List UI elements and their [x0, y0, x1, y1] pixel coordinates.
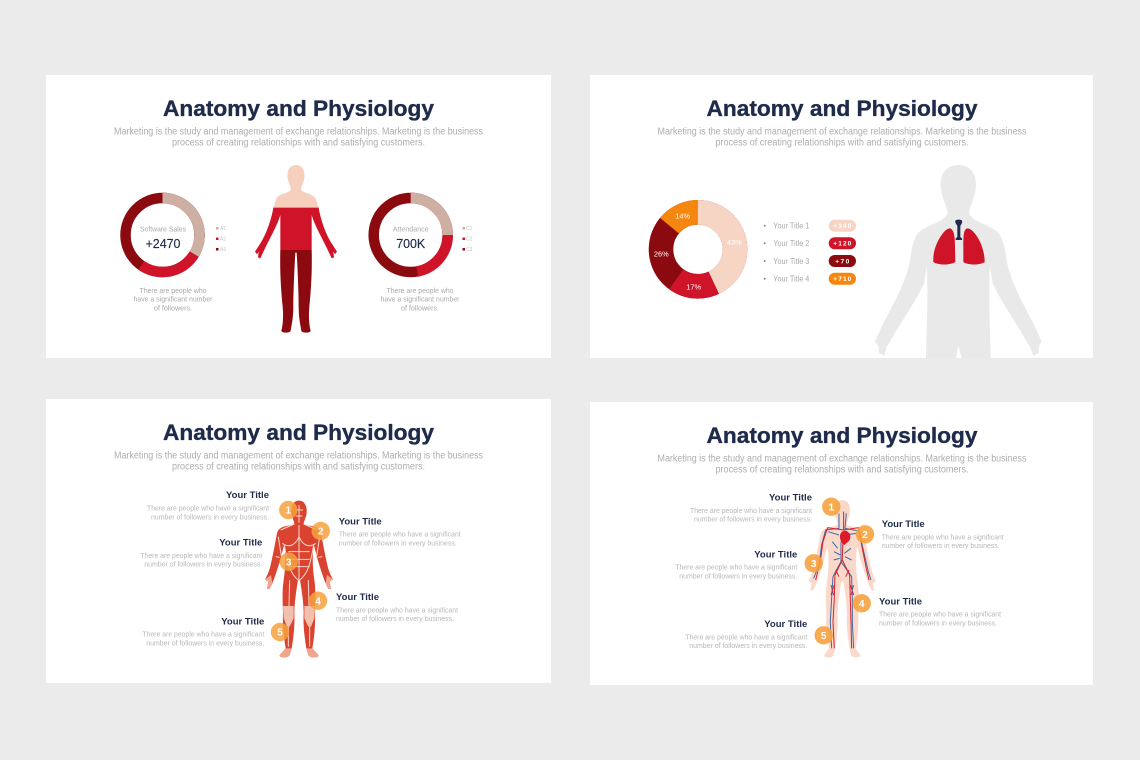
callout 3: There are people who have a significant: [675, 563, 798, 572]
intro text: process of creating relationships with and satisfying customers.: [716, 464, 968, 476]
numbered marker 4: 4: [315, 596, 321, 607]
caption: right donut: of followers.: [401, 303, 439, 312]
callout 5: number of followers in every business.: [146, 638, 264, 647]
callout 5: [685, 619, 808, 650]
human silhouette with lungs: [875, 165, 1042, 358]
donut label: software sales: [140, 224, 186, 251]
red arteries: [816, 512, 869, 648]
numbered marker 1: 1: [829, 502, 835, 513]
callout 2: number of followers in every business.: [882, 541, 1000, 550]
numbered marker 5: 5: [821, 631, 827, 642]
numbered marker 5: [271, 623, 289, 641]
callout 3: Your Title: [219, 538, 262, 549]
panel: lungs: [590, 75, 1093, 358]
legend list with value pills: Your Title 4: [773, 274, 810, 284]
blue veins: [814, 513, 871, 648]
donut label: software sales: Software Sales: [140, 224, 186, 234]
donut chart: four shares: 14%: [675, 211, 691, 220]
donut label: attendance: 700K: [396, 237, 426, 251]
donut chart: four shares: 26%: [654, 249, 669, 258]
callout 3: [675, 549, 798, 580]
callout 3: number of followers in every business.: [679, 571, 797, 580]
intro text: process of creating relationships with and satisfying customers.: [172, 138, 425, 148]
numbered marker 4: [852, 594, 871, 612]
callout 5: [142, 616, 265, 647]
muscular body figure: [265, 501, 333, 657]
caption: left donut: of followers.: [154, 303, 192, 312]
legend list with value pills: +710: [833, 276, 852, 283]
heading: Anatomy and Physiology: [163, 96, 435, 121]
legend: C series: C1: [466, 226, 473, 232]
legend list with value pills: [764, 220, 856, 285]
caption: right donut: have a significant number: [380, 294, 460, 304]
numbered marker 1: [279, 501, 297, 519]
callout 1: [147, 490, 270, 521]
donut chart: software sales: [126, 198, 200, 272]
donut chart: four shares: [654, 211, 742, 291]
caption: left donut: [134, 286, 213, 312]
icon: lungs: [933, 220, 985, 264]
callout 5: Your Title: [221, 616, 264, 627]
callout 5: number of followers in every business.: [689, 641, 807, 650]
numbered marker 4: 4: [859, 599, 865, 610]
legend list with value pills: Your Title 3: [773, 257, 810, 266]
legend list with value pills: Your Title 1: [773, 222, 810, 230]
callout 1: Your Title: [226, 490, 269, 501]
callout 1: Your Title: [769, 493, 812, 504]
intro text: Marketing is the study and management of exchange relationships. Marketing is the business: [114, 450, 483, 462]
callout 1: [690, 493, 813, 524]
intro text: Marketing is the study and management of exchange relationships. Marketing is the business: [114, 126, 483, 138]
caption: left donut: There are people who: [140, 286, 206, 295]
heading: Anatomy and Physiology: [706, 96, 978, 121]
numbered marker 1: 1: [286, 506, 292, 517]
intro text: Marketing is the study and management of exchange relationships. Marketing is the business: [658, 126, 1026, 138]
panel: circulatory system: [590, 402, 1093, 685]
numbered marker 3: 3: [811, 559, 817, 570]
numbered marker 2: [312, 522, 330, 540]
callout 3: [140, 538, 263, 569]
callout 4: There are people who have a significant: [879, 610, 1002, 619]
numbered marker 2: 2: [318, 527, 324, 538]
callout 2: [339, 516, 461, 547]
muscle detail: hands, knees and feet: [265, 575, 333, 657]
callout 1: number of followers in every business.: [151, 512, 269, 521]
intro text: [114, 450, 483, 472]
intro text: [114, 126, 483, 148]
donut chart: attendance: [374, 198, 448, 272]
callout 5: Your Title: [764, 619, 807, 630]
legend: C series: C3: [466, 247, 473, 253]
donut label: attendance: [393, 224, 429, 251]
callout 2: There are people who have a significant: [339, 530, 461, 539]
callout 4: number of followers in every business.: [879, 618, 997, 627]
legend list with value pills: +120: [833, 241, 852, 248]
callout 2: [882, 519, 1004, 550]
numbered marker 3: 3: [286, 557, 292, 568]
callout 5: There are people who have a significant: [142, 630, 265, 639]
legend list with value pills: +70: [835, 258, 850, 265]
legend: C series: [462, 226, 473, 253]
callout 4: There are people who have a significant: [336, 605, 459, 614]
caption: right donut: [380, 286, 460, 312]
legend list with value pills: Your Title 2: [773, 239, 810, 248]
callout 3: There are people who have a significant: [140, 551, 263, 560]
muscle detail: tendon lines: [276, 505, 322, 647]
numbered marker 3: [280, 552, 298, 571]
callout 4: number of followers in every business.: [336, 614, 454, 623]
panel: muscular system: [46, 399, 551, 683]
callout 2: There are people who have a significant: [882, 532, 1004, 541]
heading: Anatomy and Physiology: [706, 423, 978, 448]
numbered marker 5: 5: [277, 628, 283, 639]
donut label: attendance: Attendance: [393, 224, 429, 234]
intro text: [658, 126, 1026, 148]
callout 1: number of followers in every business.: [694, 515, 812, 524]
legend: A series: A1: [220, 226, 226, 232]
legend: A series: A2: [220, 236, 226, 242]
intro text: Marketing is the study and management of exchange relationships. Marketing is the business: [658, 454, 1026, 464]
callout 4: [336, 592, 459, 623]
human figure: colour-blocked body: [255, 165, 337, 333]
callout 2: number of followers in every business.: [339, 538, 457, 547]
legend: A series: [216, 226, 226, 253]
numbered marker 5: [814, 626, 833, 644]
callout 1: There are people who have a significant: [690, 506, 813, 515]
icon: heart: [840, 531, 850, 545]
numbered marker 4: [309, 592, 327, 610]
intro text: process of creating relationships with and satisfying customers.: [172, 462, 425, 472]
numbered marker 2: [856, 525, 874, 544]
caption: left donut: have a significant number: [134, 294, 213, 304]
donut label: software sales: +2470: [146, 237, 181, 251]
numbered marker 1: [822, 498, 840, 516]
circulatory body figure: [808, 500, 876, 657]
heading: Anatomy and Physiology: [163, 420, 435, 445]
caption: right donut: There are people who: [386, 286, 454, 295]
callout 4: Your Title: [336, 592, 379, 603]
numbered marker 2: 2: [862, 530, 868, 541]
callout 2: Your Title: [339, 516, 382, 527]
intro text: process of creating relationships with and satisfying customers.: [716, 138, 968, 148]
callout 4: Your Title: [879, 596, 922, 607]
numbered marker 3: [804, 554, 823, 572]
callout 5: There are people who have a significant: [685, 632, 808, 641]
callout 4: [879, 596, 1002, 627]
callout 1: There are people who have a significant: [147, 504, 270, 513]
legend: A series: A3: [220, 247, 226, 253]
legend list with value pills: +340: [833, 223, 852, 230]
callout 3: Your Title: [754, 549, 797, 560]
callout 2: Your Title: [882, 519, 925, 530]
legend: C series: C2: [466, 236, 473, 242]
intro text: [658, 454, 1026, 476]
donut chart: four shares: 17%: [686, 282, 702, 291]
donut chart: four shares: 43%: [727, 238, 742, 247]
callout 3: number of followers in every business.: [144, 560, 262, 569]
panel: body composition donuts: [46, 75, 551, 358]
